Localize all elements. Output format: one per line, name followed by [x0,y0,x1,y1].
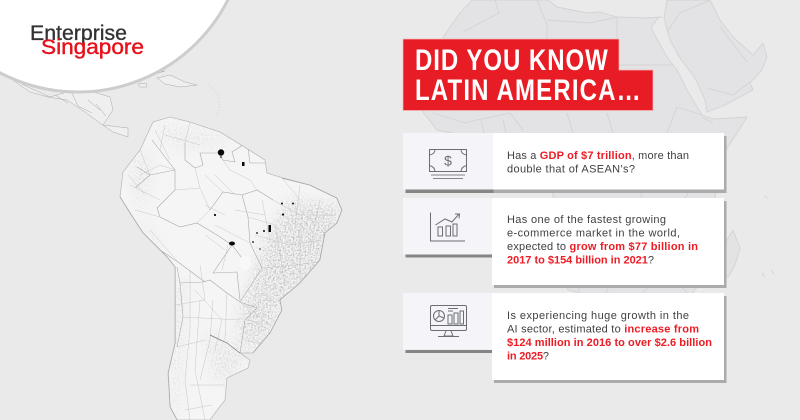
panel: GDP card [403,133,726,193]
dense road texture [130,126,340,410]
main borders and roads [135,140,273,353]
South America landmass [120,117,342,420]
black urban clusters [214,149,294,250]
text: AI fact: AI sector, estimated to increase from [507,324,699,336]
title banner: LATIN AMERICA… [415,72,641,107]
text: e-commerce fact [507,214,698,266]
text: AI fact: in 2025? [507,350,549,362]
text: e-commerce fact: 2017 to $154 billion in 2021? [507,254,654,266]
title banner [403,39,653,110]
logo: Enterprise Singapore: Singapore [41,36,144,59]
map: Latin America road network [10,71,350,420]
icon: banknote: $ [444,152,452,168]
logo: Enterprise Singapore: Enterprise [30,22,127,45]
panel: e-commerce card [403,198,726,288]
logo: Enterprise Singapore [30,22,144,59]
title banner: DID YOU KNOW [415,42,608,77]
text: e-commerce fact: e-commerce market in the world, [507,228,680,240]
text: GDP fact [507,150,689,176]
text: GDP fact: Has a GDP of $7 trillion, more than [507,150,689,162]
Central America and Caribbean [10,71,220,137]
text: AI fact [507,310,712,362]
Pantanal clearing [241,257,250,270]
logo corner circle [0,0,246,92]
icon: monitor with charts [430,306,466,336]
text: e-commerce fact: Has one of the fastest growing [507,214,666,226]
icon: growth chart [430,212,465,241]
text: AI fact: Is experiencing huge growth in the [507,310,689,322]
panel: AI card [403,293,726,383]
text: e-commerce fact: expected to grow from $77 billion in [507,241,698,253]
map: Africa and Middle East [423,0,774,296]
icon: banknote [430,150,466,178]
text: GDP fact: double that of ASEAN’s? [507,164,635,176]
coast shading [120,178,342,420]
text: AI fact: $124 million in 2016 to over $2.6 billion [507,337,712,349]
